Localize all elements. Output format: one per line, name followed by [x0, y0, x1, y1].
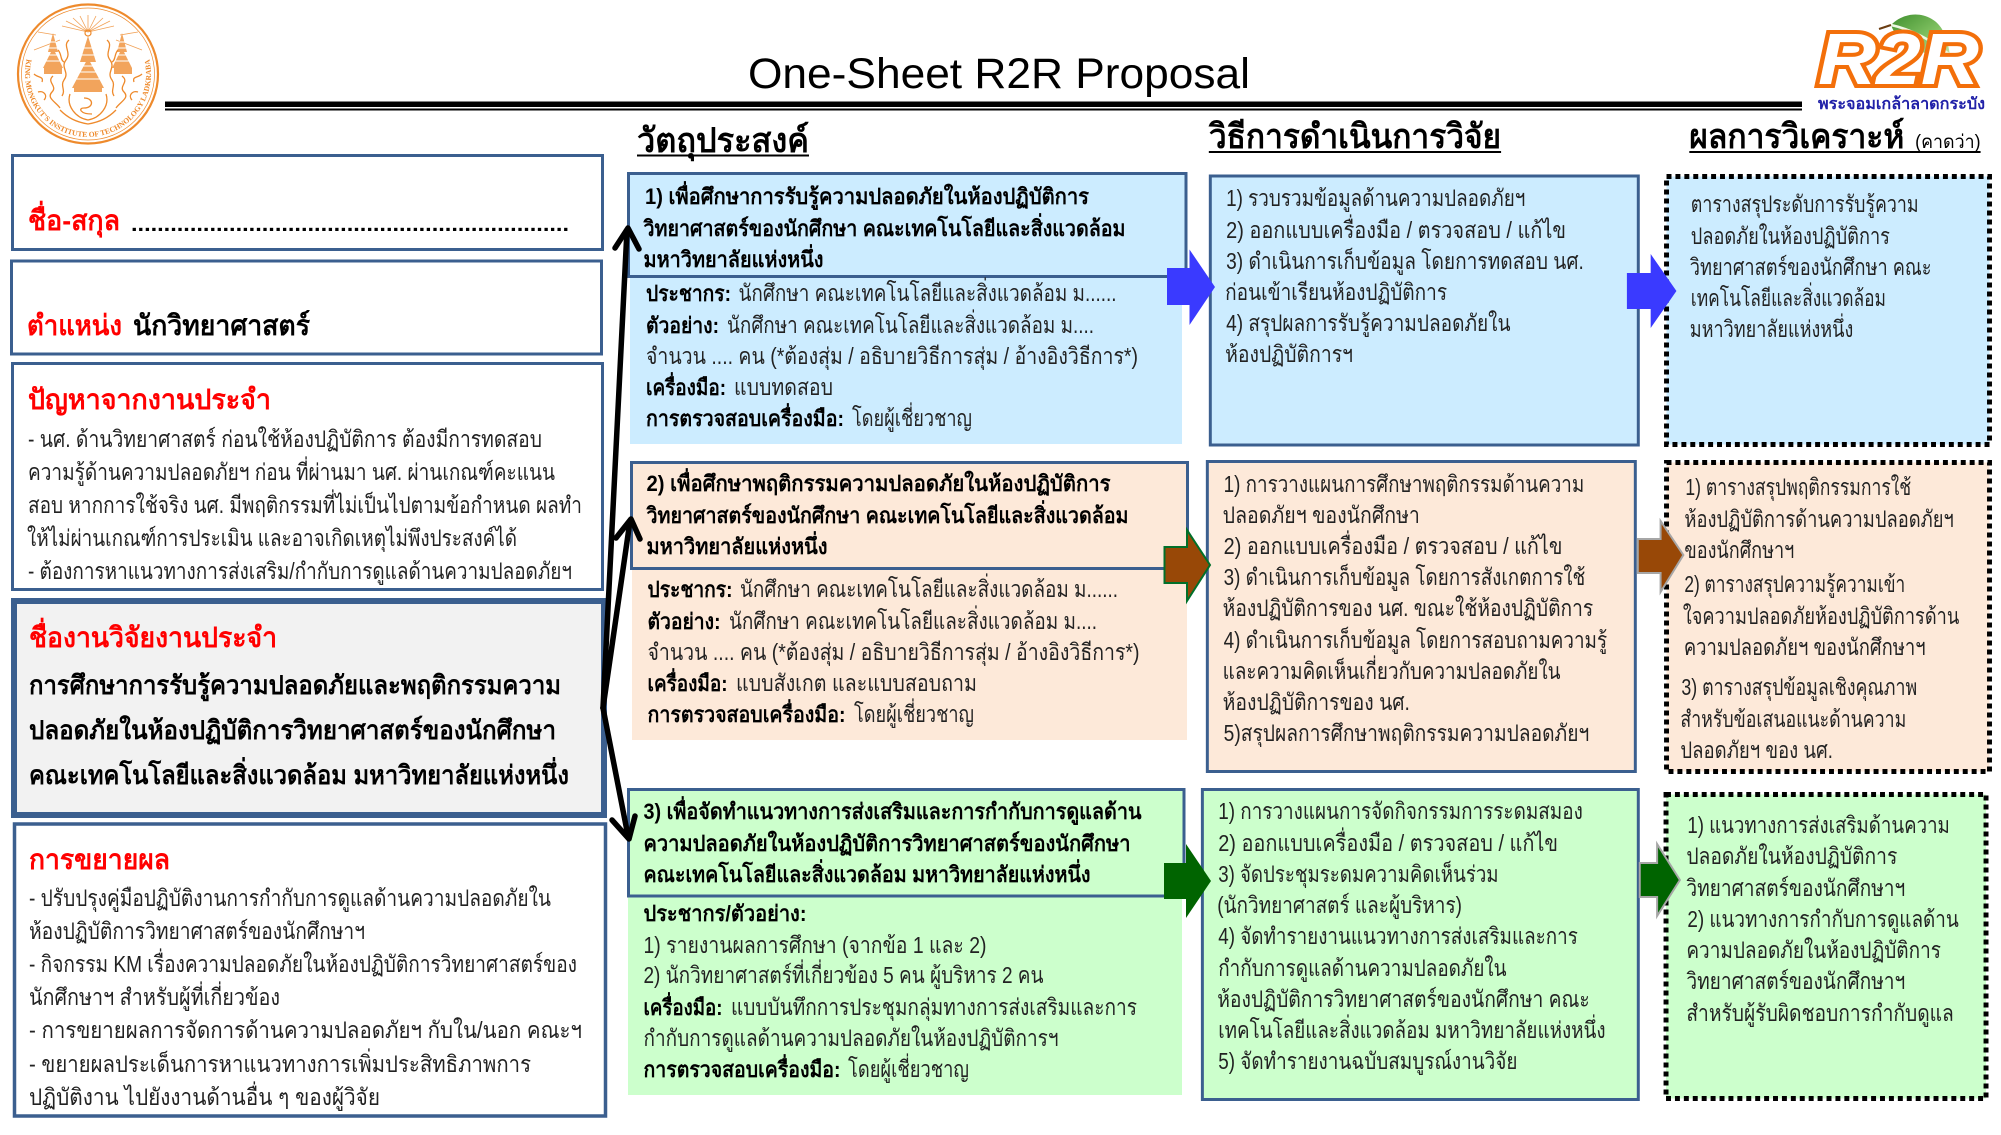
objective 3 text: กำกับการดูแลด้านความปลอดภัยในห้องปฏิบัติการฯ	[644, 1025, 1058, 1052]
objective 3 text: การตรวจสอบเครื่องมือ:	[644, 1053, 840, 1082]
problem text: - นศ. ด้านวิทยาศาสตร์ ก่อนใช้ห้องปฏิบัติการ ต้องมีการทดสอบ	[28, 426, 542, 452]
problem heading: ปัญหาจากงานประจำ	[28, 384, 271, 416]
research title text: ปลอดภัยในห้องปฏิบัติการวิทยาศาสตร์ของนักศึกษา	[29, 715, 556, 745]
panel: method 3	[1202, 790, 1638, 1100]
objective 2 text: นักศึกษา คณะเทคโนโลยีและสิ่งแวดล้อม ม....	[729, 605, 1097, 634]
objective 1 text: แบบทดสอบ	[734, 374, 833, 400]
objective 1 text: 1) เพื่อศึกษาการรับรู้ความปลอดภัยในห้องปฏิบัติการ	[645, 180, 1089, 211]
result 2 text: สำหรับข้อเสนอแนะด้านความ	[1680, 706, 1906, 732]
problem text: - ต้องการหาแนวทางการส่งเสริม/กำกับการดูแลด้านความปลอดภัยฯ	[28, 558, 572, 585]
objective 1 text: นักศึกษา คณะเทคโนโลยีและสิ่งแวดล้อม ม......	[738, 277, 1116, 306]
objective 3 header	[628, 790, 1184, 896]
dissemination text: - การขยายผลการจัดการด้านความปลอดภัยฯ กับใน/นอก คณะฯ	[29, 1017, 582, 1043]
dissemination heading: การขยายผล	[29, 844, 170, 875]
panel: result 1	[1667, 176, 1989, 444]
panel: objective 2	[632, 462, 1188, 740]
method 1 text: ห้องปฏิบัติการฯ	[1225, 341, 1353, 367]
problem text: ความรู้ด้านความปลอดภัยฯ ก่อน ที่ผ่านมา นศ. ผ่านเกณฑ์คะแนน	[28, 456, 555, 486]
method 2 text: 3) ดำเนินการเก็บข้อมูล โดยการสังเกตการใช้	[1224, 562, 1585, 591]
icon: R2R logo	[1818, 15, 1985, 113]
result 2 text: 3) ตารางสรุปข้อมูลเชิงคุณภาพ	[1681, 674, 1917, 701]
objective 1 text	[643, 180, 1138, 432]
objective 2 text	[646, 467, 1140, 728]
objective 1 text: วิทยาศาสตร์ของนักศึกษา คณะเทคโนโลยีและสิ่งแวดล้อม	[643, 212, 1126, 241]
panel: method 1	[1210, 176, 1638, 445]
result 1 text: ปลอดภัยในห้องปฏิบัติการ	[1691, 223, 1890, 249]
problem text: สอบ หากการใช้จริง นศ. มีพฤติกรรมที่ไม่เป็นไปตามข้อกำหนด ผลทำ	[28, 489, 582, 518]
objective 2 text: แบบสังเกต และแบบสอบถาม	[736, 670, 977, 696]
logo caption: พระจอมเกล้าลาดกระบัง	[1818, 95, 1985, 113]
method 1 text: 3) ดำเนินการเก็บข้อมูล โดยการทดสอบ นศ.	[1226, 246, 1584, 275]
problem text	[27, 426, 582, 585]
objective 3 text: โดยผู้เชี่ยวชาญ	[848, 1053, 969, 1083]
logo wordmark: R2R	[1818, 20, 1979, 100]
research title heading: ชื่องานวิจัยงานประจำ	[29, 617, 277, 653]
dissemination text: - ปรับปรุงคู่มือปฏิบัติงานการกำกับการดูแลด้านความปลอดภัยใน	[29, 885, 551, 912]
objective 2 text: ตัวอย่าง:	[648, 609, 720, 634]
result 2 text: ปลอดภัยฯ ของ นศ.	[1680, 737, 1833, 763]
method 2 text: 2) ออกแบบเครื่องมือ / ตรวจสอบ / แก้ไข	[1224, 530, 1563, 559]
objective 2 text: มหาวิทยาลัยแห่งหนึ่ง	[646, 530, 828, 559]
objective 3 text: คณะเทคโนโลยีและสิ่งแวดล้อม มหาวิทยาลัยแห่งหนึ่ง	[644, 858, 1090, 887]
objective 3 text	[644, 795, 1142, 1083]
result 1 text: มหาวิทยาลัยแห่งหนึ่ง	[1690, 313, 1853, 342]
panel: dissemination	[14, 824, 606, 1116]
result 1 text: เทคโนโลยีและสิ่งแวดล้อม	[1691, 282, 1886, 311]
heading: analysis results: (คาดว่า)	[1915, 132, 1981, 153]
method 2 text: 4) ดำเนินการเก็บข้อมูล โดยการสอบถามความรู้	[1224, 625, 1607, 654]
heading: objectives: วัตถุประสงค์	[637, 121, 809, 162]
objective 3 text: ประชากร/ตัวอย่าง:	[644, 901, 806, 926]
dissemination text	[29, 885, 582, 1111]
objective 1 text: มหาวิทยาลัยแห่งหนึ่ง	[644, 243, 824, 272]
objective 1 text: จำนวน .... คน (*ต้องสุ่ม / อธิบายวิธีการสุ่ม / อ้างอิงวิธีการ*)	[646, 343, 1138, 370]
panel: name	[12, 156, 602, 250]
arrow: brown objective to method	[1164, 530, 1210, 601]
result 2 text: ความปลอดภัยฯ ของนักศึกษาฯ	[1684, 634, 1926, 660]
panel: routine-work problem	[12, 364, 602, 590]
method 3 text: เทคโนโลยีและสิ่งแวดล้อม มหาวิทยาลัยแห่งหนึ่ง	[1218, 1014, 1606, 1043]
header rule	[165, 102, 1802, 110]
position value: นักวิทยาศาสตร์	[133, 310, 310, 341]
objective 2 text: เครื่องมือ:	[648, 667, 728, 696]
result 1 text: วิทยาศาสตร์ของนักศึกษา คณะ	[1690, 254, 1932, 280]
result 2 text: 2) ตารางสรุปความรู้ความเข้า	[1684, 571, 1905, 598]
dissemination text: - ขยายผลประเด็นการหาแนวทางการเพิ่มประสิทธิภาพการ	[29, 1048, 531, 1077]
result 2 text: 1) ตารางสรุปพฤติกรรมการใช้	[1685, 474, 1911, 501]
method 2 text: 1) การวางแผนการศึกษาพฤติกรรมด้านความ	[1224, 471, 1584, 497]
method 3 text: กำกับการดูแลด้านความปลอดภัยใน	[1218, 955, 1507, 982]
result 3 text: ความปลอดภัยในห้องปฏิบัติการ	[1686, 937, 1941, 963]
panel: result 3	[1666, 794, 1986, 1098]
arrow: green method to result	[1640, 844, 1680, 916]
position label: ตำแหน่ง	[27, 310, 122, 341]
objective 1 header	[628, 174, 1186, 276]
method 3 text: 5) จัดทำรายงานฉบับสมบูรณ์งานวิจัย	[1218, 1048, 1517, 1075]
arrow: brown method to result	[1638, 521, 1683, 592]
arrow: blue method to result	[1627, 254, 1676, 328]
panel: objective 3	[628, 790, 1184, 1095]
method 3 text: 4) จัดทำรายงานแนวทางการส่งเสริมและการ	[1218, 923, 1578, 949]
name dots: ...................................................................	[131, 213, 569, 236]
result 1 text: ตารางสรุประดับการรับรู้ความ	[1691, 191, 1919, 218]
objective 3 text: ความปลอดภัยในห้องปฏิบัติการวิทยาศาสตร์ของนักศึกษา	[644, 830, 1130, 856]
objective 2 text: 2) เพื่อศึกษาพฤติกรรมความปลอดภัยในห้องปฏิบัติการ	[646, 467, 1111, 496]
arrow: to objective 2	[603, 519, 640, 708]
objective 3 text: 2) นักวิทยาศาสตร์ที่เกี่ยวข้อง 5 คน ผู้บริหาร 2 คน	[644, 959, 1044, 989]
name label: ชื่อ-สกุล	[28, 200, 120, 238]
arrow: to objective 1	[603, 228, 639, 708]
objective 2 text: วิทยาศาสตร์ของนักศึกษา คณะเทคโนโลยีและสิ่งแวดล้อม	[646, 499, 1128, 528]
result 3 text: สำหรับผู้รับผิดชอบการกำกับดูแล	[1686, 1000, 1954, 1027]
objective 1 text: ประชากร:	[646, 281, 731, 306]
method 3 text: 2) ออกแบบเครื่องมือ / ตรวจสอบ / แก้ไข	[1218, 827, 1558, 856]
objective 2 text: โดยผู้เชี่ยวชาญ	[854, 698, 974, 728]
heading: methods: วิธีการดำเนินการวิจัย	[1208, 118, 1501, 156]
objective 3 text: เครื่องมือ:	[644, 991, 722, 1020]
research title text: คณะเทคโนโลยีและสิ่งแวดล้อม มหาวิทยาลัยแห่งหนึ่ง	[29, 756, 569, 790]
research title text: การศึกษาการรับรู้ความปลอดภัยและพฤติกรรมความ	[29, 670, 561, 702]
arrow: to objective 3	[603, 708, 635, 839]
title: One-Sheet R2R Proposal	[748, 50, 1250, 98]
result 3 text: วิทยาศาสตร์ของนักศึกษาฯ	[1686, 875, 1905, 901]
problem text: ให้ไม่ผ่านเกณฑ์การประเมิน และอาจเกิดเหตุไม่พึงประสงค์ได้	[27, 525, 517, 552]
research title text	[29, 670, 569, 790]
objective 3 text: แบบบันทึกการประชุมกลุ่มทางการส่งเสริมและการ	[731, 994, 1137, 1021]
result 2 text	[1680, 474, 1960, 763]
heading: analysis results: ผลการวิเคราะห์	[1689, 117, 1904, 156]
objective 2 header	[632, 462, 1188, 568]
method 2 text: ห้องปฏิบัติการของ นศ.	[1223, 689, 1410, 715]
objective 3 text: 1) รายงานผลการศึกษา (จากข้อ 1 และ 2)	[644, 932, 986, 958]
result 3 text	[1686, 812, 1959, 1027]
objective 1 text: นักศึกษา คณะเทคโนโลยีและสิ่งแวดล้อม ม....	[727, 309, 1094, 338]
objective 2 text: จำนวน .... คน (*ต้องสุ่ม / อธิบายวิธีการสุ่ม / อ้างอิงวิธีการ*)	[648, 639, 1140, 666]
objective 1 text: การตรวจสอบเครื่องมือ:	[646, 402, 844, 431]
dissemination text: ห้องปฏิบัติการวิทยาศาสตร์ของนักศึกษาฯ	[29, 918, 365, 944]
method 3 text: 1) การวางแผนการจัดกิจกรรมการระดมสมอง	[1218, 798, 1583, 824]
panel: result 2	[1667, 462, 1989, 772]
objective 1 text: เครื่องมือ:	[646, 371, 726, 400]
method 1 text	[1225, 185, 1584, 367]
method 1 text: 2) ออกแบบเครื่องมือ / ตรวจสอบ / แก้ไข	[1226, 214, 1566, 243]
method 3 text: ห้องปฏิบัติการวิทยาศาสตร์ของนักศึกษา คณะ	[1217, 986, 1590, 1012]
panel: routine research title	[14, 601, 604, 815]
arrow: blue objective to method	[1167, 250, 1215, 325]
arrow: green objective to method	[1164, 844, 1211, 918]
method 2 text: 5)สรุปผลการศึกษาพฤติกรรมความปลอดภัยฯ	[1224, 720, 1589, 747]
arrows: title to objectives	[603, 228, 640, 839]
result 1 text	[1690, 191, 1932, 342]
panel: objective 1	[628, 174, 1186, 444]
objective 2 text: ประชากร:	[648, 577, 732, 602]
result 3 text: 1) แนวทางการส่งเสริมด้านความ	[1687, 812, 1950, 838]
method 2 text: ปลอดภัยฯ ของนักศึกษา	[1223, 502, 1420, 528]
objective 1 text: ตัวอย่าง:	[646, 313, 719, 338]
method 1 text: 1) รวบรวมข้อมูลด้านความปลอดภัยฯ	[1226, 185, 1525, 212]
result 3 text: ปลอดภัยในห้องปฏิบัติการ	[1686, 843, 1897, 869]
method 1 text: 4) สรุปผลการรับรู้ความปลอดภัยใน	[1226, 310, 1511, 337]
objective 1 text: โดยผู้เชี่ยวชาญ	[852, 402, 972, 432]
method 3 text: 3) จัดประชุมระดมความคิดเห็นร่วม	[1218, 859, 1499, 888]
method 2 text: และความคิดเห็นเกี่ยวกับความปลอดภัยใน	[1223, 655, 1561, 684]
method 3 text	[1217, 798, 1606, 1075]
dissemination text: นักศึกษาฯ สำหรับผู้ที่เกี่ยวข้อง	[29, 981, 280, 1011]
panel: method 2	[1207, 462, 1635, 772]
icon: leaf	[1879, 15, 1950, 55]
method 1 text: ก่อนเข้าเรียนห้องปฏิบัติการ	[1225, 279, 1447, 305]
objective 3 text: 3) เพื่อจัดทำแนวทางการส่งเสริมและการกำกับการดูแลด้าน	[644, 795, 1142, 826]
method 2 text	[1223, 471, 1607, 747]
objective 2 text: การตรวจสอบเครื่องมือ:	[648, 698, 846, 727]
method 2 text: ห้องปฏิบัติการของ นศ. ขณะใช้ห้องปฏิบัติการ	[1223, 595, 1593, 621]
objective 2 text: นักศึกษา คณะเทคโนโลยีและสิ่งแวดล้อม ม......	[740, 573, 1118, 602]
result 2 text: ของนักศึกษาฯ	[1684, 537, 1794, 563]
result 3 text: วิทยาศาสตร์ของนักศึกษาฯ	[1686, 968, 1905, 994]
dissemination text: ปฏิบัติงาน ไปยังงานด้านอื่น ๆ ของผู้วิจัย	[29, 1081, 380, 1111]
method 3 text: (นักวิทยาศาสตร์ และผู้บริหาร)	[1217, 892, 1462, 919]
panel: position	[12, 261, 602, 354]
dissemination text: - กิจกรรม KM เรื่องความปลอดภัยในห้องปฏิบัติการวิทยาศาสตร์ของ	[29, 948, 577, 977]
